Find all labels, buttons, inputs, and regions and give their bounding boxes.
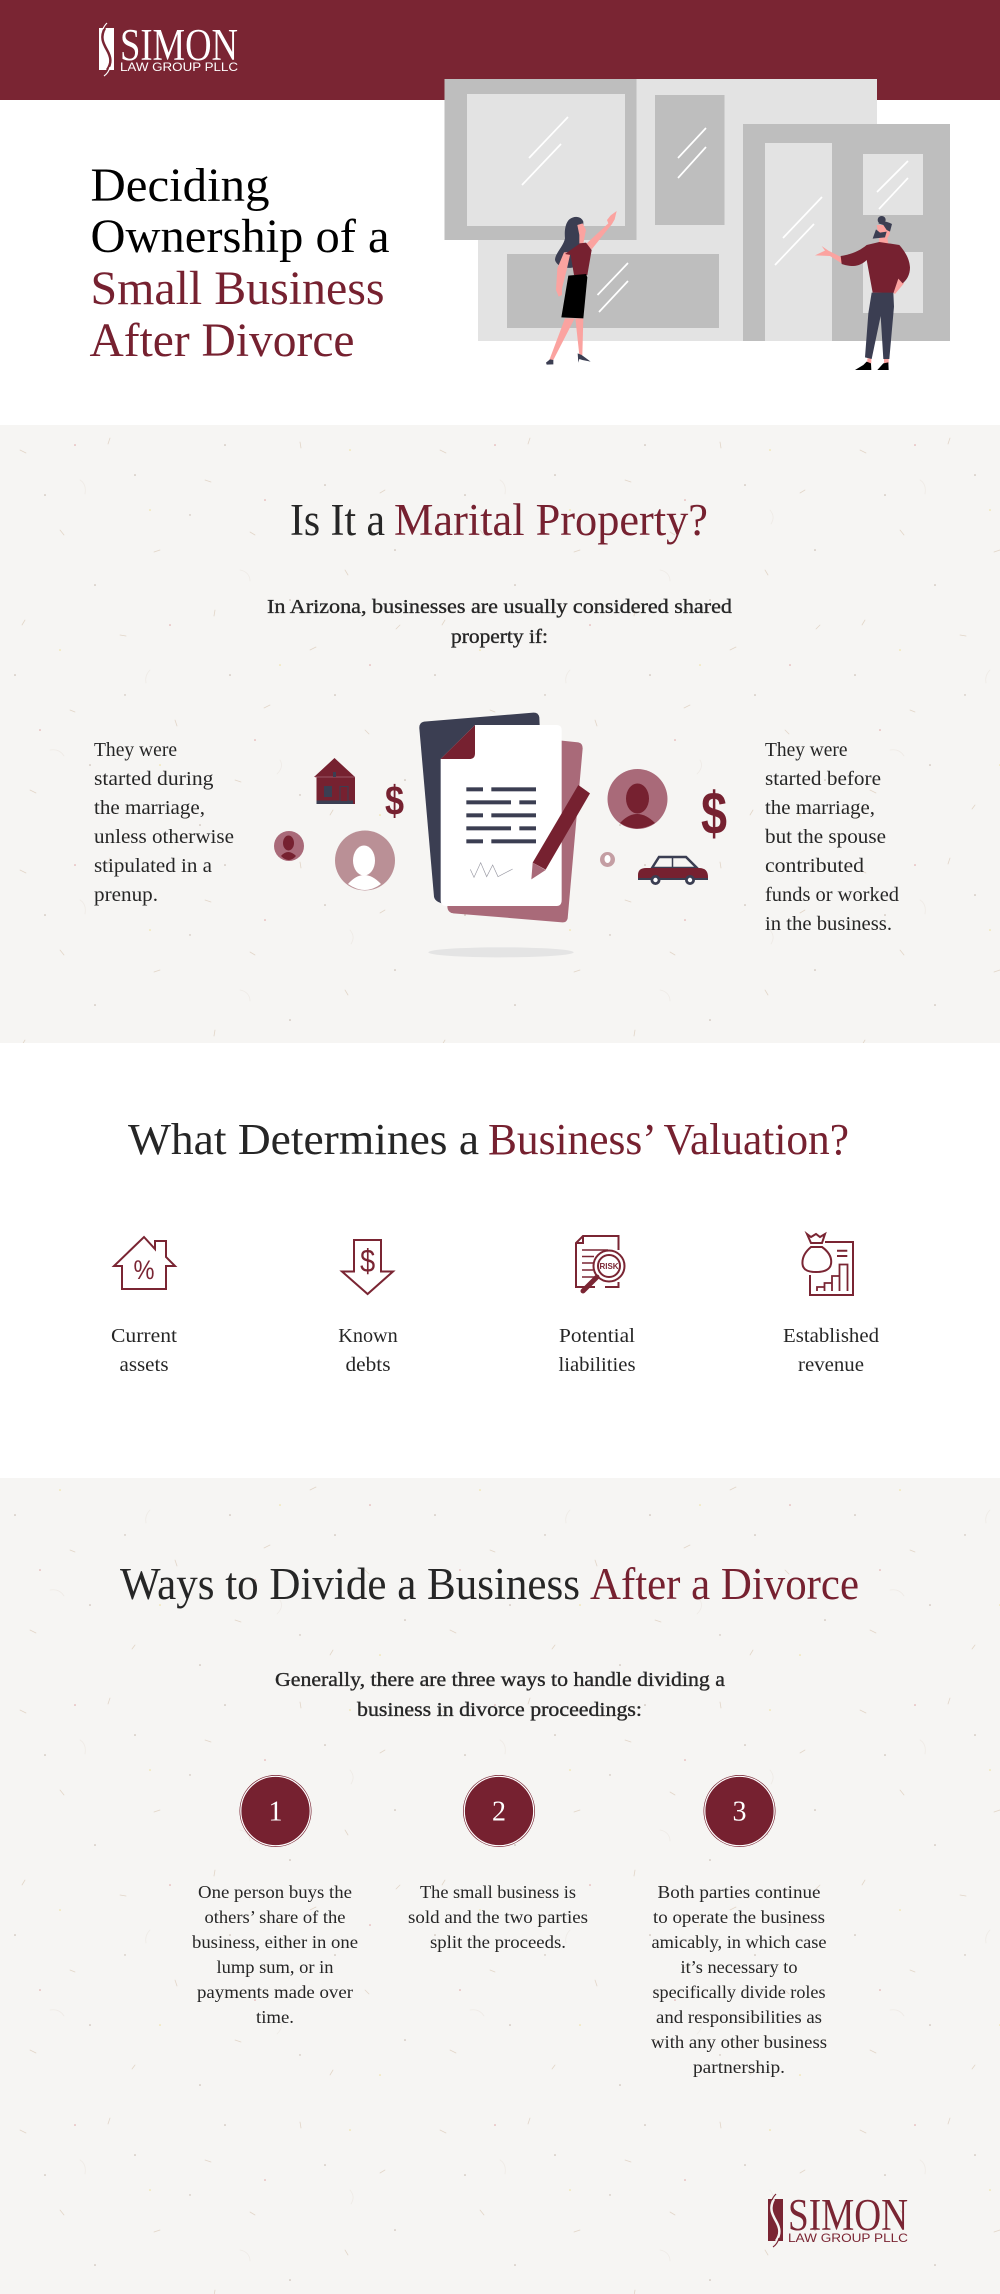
badge: number 2: 2 <box>492 1796 506 1828</box>
text: option 1: lump sum, or in <box>216 1957 334 1977</box>
text block: right condition: started before <box>765 768 881 790</box>
text: option 3: it’s necessary to <box>680 1957 798 1977</box>
icon: house <box>314 758 355 804</box>
label: known debts <box>338 1325 398 1376</box>
icon: dollar left: $ <box>385 777 404 824</box>
item: established revenue <box>783 1234 879 1376</box>
illustration: woman pointing <box>546 211 617 365</box>
intro text: three ways <box>275 1670 725 1721</box>
text block: left condition: prenup. <box>94 884 158 906</box>
heading: ways to divide <box>120 1559 859 1609</box>
badge: number 1: 1 <box>268 1796 282 1828</box>
label: potential liabilities: Potential <box>559 1325 635 1347</box>
text block: right condition: in the business. <box>765 913 892 935</box>
text: option 3: with any other business <box>651 2032 827 2052</box>
label: known debts: debts <box>346 1354 391 1376</box>
text block: right condition <box>765 739 899 935</box>
panel: ways to divide <box>0 1478 1000 2294</box>
label: potential liabilities: liabilities <box>558 1354 636 1376</box>
logo: Simon Law Group header: SIMON <box>120 20 238 70</box>
intro text: three ways: business in divorce proceedings: <box>357 1700 642 1721</box>
text: option 1: business, either in one <box>192 1932 358 1952</box>
icon: dollar right: $ <box>701 780 727 847</box>
option 1 <box>192 1775 358 2027</box>
label: established revenue: Established <box>783 1325 879 1347</box>
text block: left condition: stipulated in a <box>94 855 212 877</box>
text: option 3: partnership. <box>693 2057 785 2077</box>
text block: right condition: contributed <box>765 855 864 877</box>
label: potential liabilities <box>558 1325 636 1376</box>
panel: is it a marital property <box>0 425 1000 1043</box>
text: option 3: amicably, in which case <box>652 1932 827 1952</box>
icon: money bag and chart <box>802 1234 853 1295</box>
illustration: man gesturing <box>815 216 910 370</box>
text: option 3 <box>651 1882 827 2077</box>
text: option 3: and responsibilities as <box>656 2007 822 2027</box>
intro text: arizona <box>267 597 732 648</box>
hero title: Small Business <box>90 262 384 315</box>
text: option 2 <box>408 1882 588 1952</box>
text: option 3: Both parties continue <box>658 1882 821 1902</box>
text: option 1: payments made over <box>197 1982 353 2002</box>
hero title: Ownership of a <box>90 210 390 263</box>
illustration: document with pen <box>419 713 590 957</box>
icon: house percent: % <box>134 1255 154 1285</box>
text block: right condition: but the spouse <box>765 826 886 848</box>
item: current assets <box>111 1237 177 1376</box>
heading: marital property: Marital Property? <box>394 495 708 545</box>
illustration: office building <box>444 79 950 341</box>
text: option 2: split the proceeds. <box>430 1932 566 1952</box>
text block: left condition: They were <box>94 739 177 761</box>
text: option 1 <box>192 1882 358 2027</box>
text block: left condition <box>94 739 234 906</box>
option 3 <box>651 1775 827 2077</box>
text block: left condition: the marriage, <box>94 797 205 819</box>
intro text: three ways: Generally, there are three ways to handle dividing a <box>275 1670 725 1691</box>
badge: number 3 <box>704 1775 776 1847</box>
logo: Simon Law Group header: LAW GROUP PLLC <box>120 62 238 74</box>
heading: marital property: Is It a <box>290 495 385 545</box>
intro text: arizona: property if: <box>451 627 548 648</box>
text block: left condition: unless otherwise <box>94 826 234 848</box>
text block: right condition: the marriage, <box>765 797 875 819</box>
option 2 <box>408 1775 588 1952</box>
logo: Simon Law Group footer <box>768 2190 908 2247</box>
intro text: arizona: In Arizona, businesses are usually considered shared <box>267 597 732 618</box>
label: established revenue: revenue <box>798 1354 864 1376</box>
heading: ways to divide: Ways to Divide a Business <box>120 1559 580 1609</box>
heading: ways to divide: After a Divorce <box>590 1559 859 1609</box>
text: option 2: The small business is <box>420 1882 576 1902</box>
icon: person large <box>335 830 395 890</box>
label: known debts: Known <box>338 1325 398 1347</box>
label: current assets: assets <box>120 1354 169 1376</box>
text: option 1: One person buys the <box>198 1882 352 1902</box>
label: established revenue <box>783 1325 879 1376</box>
logo: Simon Law Group footer: LAW GROUP PLLC <box>788 2233 908 2245</box>
label: current assets <box>111 1325 177 1376</box>
panel: business valuation <box>111 1115 879 1376</box>
header band <box>0 0 1000 100</box>
logo: Simon Law Group footer: SIMON <box>788 2190 908 2240</box>
text: option 2: sold and the two parties <box>408 1907 588 1927</box>
heading: valuation: What Determines a <box>128 1115 479 1164</box>
icon: risk magnifier: RISK <box>599 1262 619 1271</box>
badge: number 1 <box>240 1775 312 1847</box>
text: option 1: others’ share of the <box>204 1907 346 1927</box>
label: current assets: Current <box>111 1325 177 1347</box>
logo: Simon Law Group header <box>99 20 238 76</box>
hero title <box>90 159 390 367</box>
icon: person right <box>608 769 668 829</box>
item: potential liabilities <box>558 1236 636 1376</box>
hero title: After Divorce <box>90 314 354 367</box>
hero title: Deciding <box>90 159 270 212</box>
icon: car <box>638 857 708 885</box>
text block: right condition: They were <box>765 739 848 761</box>
text: option 3: to operate the business <box>653 1907 825 1927</box>
badge: number 3: 3 <box>732 1796 746 1828</box>
text: option 1: time. <box>256 2007 294 2027</box>
text block: right condition: funds or worked <box>765 884 899 906</box>
icon: person small <box>274 831 304 861</box>
heading: valuation: Business’ Valuation? <box>488 1115 849 1164</box>
text block: left condition: started during <box>94 768 214 790</box>
badge: number 2 <box>463 1775 535 1847</box>
icon: down arrow dollar: $ <box>360 1243 375 1279</box>
icon: person tiny <box>600 852 615 867</box>
item: known debts <box>338 1240 398 1376</box>
heading: valuation <box>128 1115 849 1164</box>
text: option 3: specifically divide roles <box>652 1982 826 2002</box>
